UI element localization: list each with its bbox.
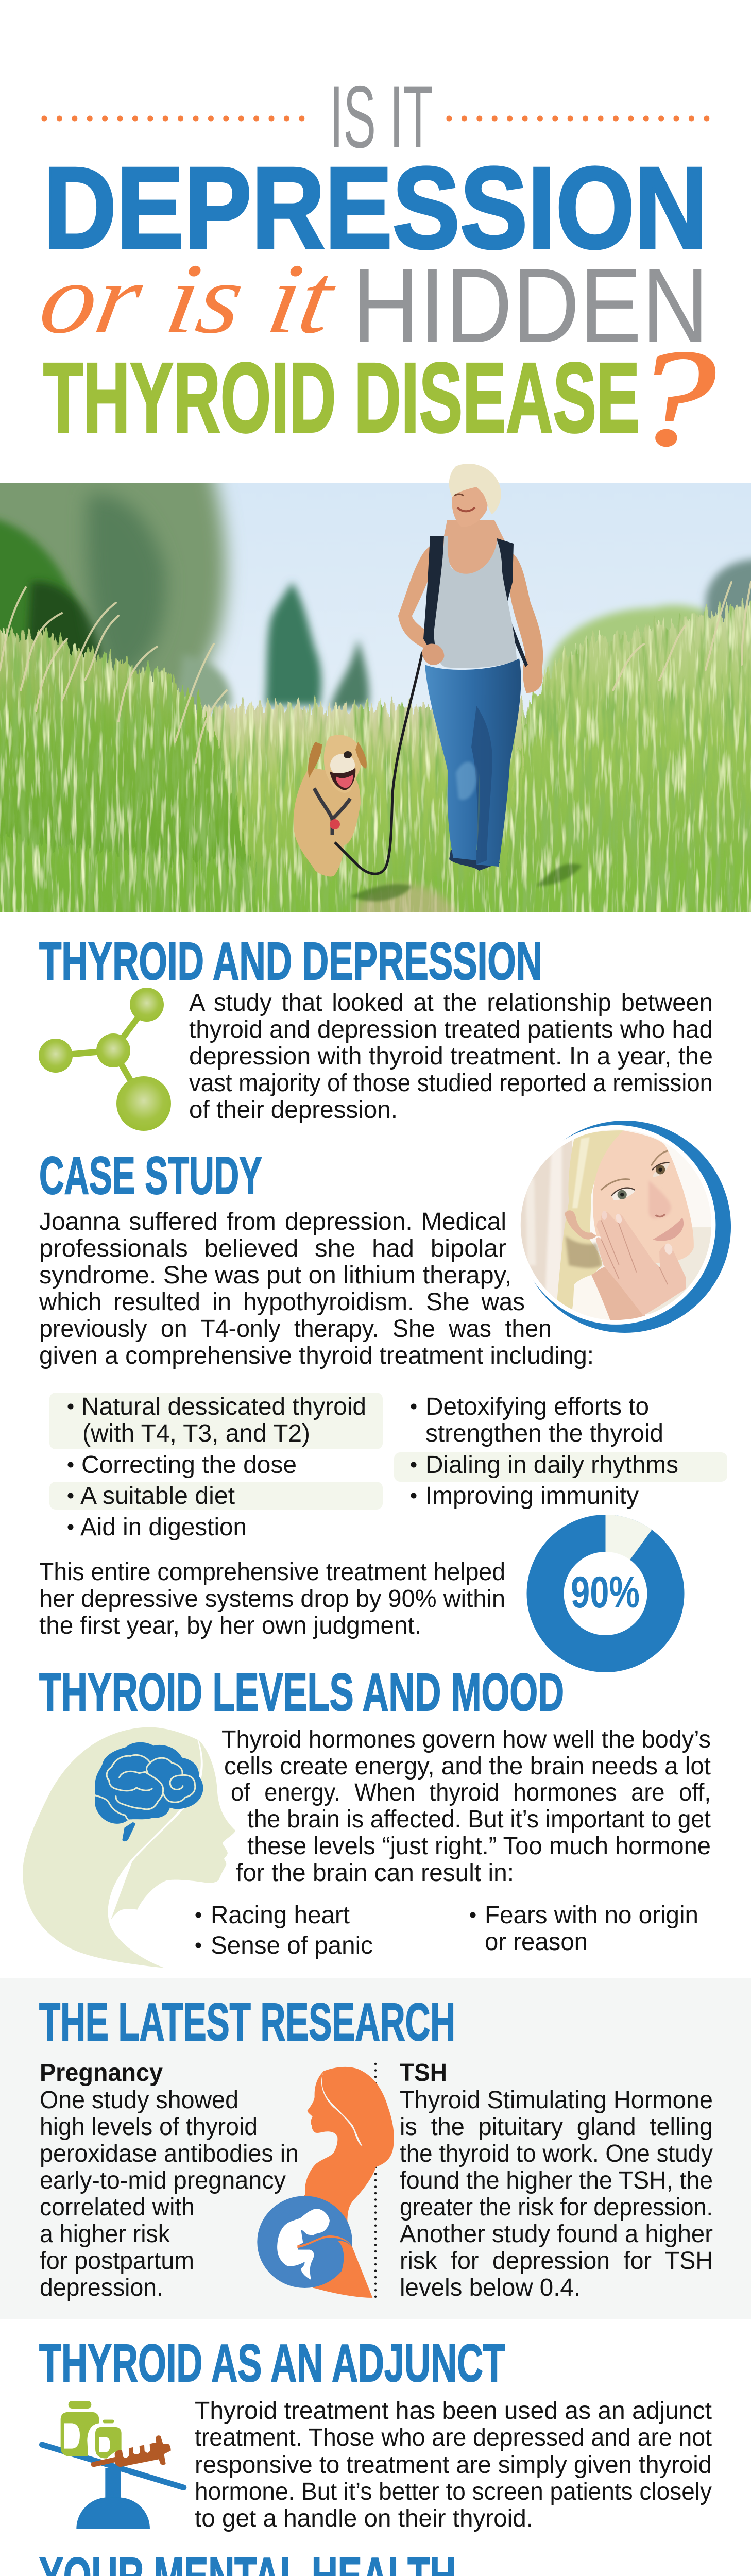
result text: This entire comprehensive treatment helped (39, 1558, 505, 1586)
icon: scale with pills and syringe (42, 2401, 184, 2529)
heading: THYROID AS AN ADJUNCT (39, 2333, 505, 2393)
tsh column: found the higher the TSH, the (400, 2167, 713, 2194)
list item: digestion: Aid in digestion (80, 1514, 247, 1541)
tsh column: is the pituitary gland telling (400, 2113, 713, 2141)
tsh column: greater the risk for depression. (400, 2194, 713, 2221)
tsh column: levels below 0.4. (400, 2274, 581, 2301)
body text: to get a handle on their thyroid. (195, 2505, 533, 2532)
dotted divider (374, 2064, 377, 2299)
icon: pregnant silhouette (257, 2067, 394, 2298)
body text (39, 1208, 594, 1369)
body text: responsive to treatment are simply given thyroid (195, 2451, 712, 2479)
symptom list: Sense of panic (211, 1932, 373, 1959)
highlight: suitable diet (49, 1482, 383, 1510)
donut chart: 90%: 90% (571, 1568, 640, 1617)
body text: depression with thyroid treatment. In a year, the (189, 1043, 713, 1070)
dog (294, 735, 367, 877)
body text: thyroid and depression treated patients who had (189, 1016, 713, 1043)
dotted rule right (449, 115, 707, 122)
pregnancy column: a higher risk (40, 2221, 170, 2248)
pregnancy column: high levels of thyroid (40, 2113, 258, 2141)
list item: correcting dose: Correcting the dose (81, 1451, 297, 1479)
woman (398, 464, 543, 871)
result text: her depressive systems drop by 90% within (39, 1585, 505, 1613)
pregnancy column: Pregnancy (40, 2059, 163, 2087)
section: thyroid and depression (39, 931, 713, 1131)
body text: vast majority of those studied reported a remission (189, 1070, 713, 1097)
body text: Joanna suffered from depression. Medical (39, 1208, 506, 1235)
baby (277, 2209, 330, 2280)
result text: the first year, by her own judgment. (39, 1612, 421, 1639)
heading: THE LATEST RESEARCH (39, 1992, 455, 2052)
result text (39, 1558, 505, 1639)
tsh column: risk for depression for TSH (400, 2247, 713, 2275)
tsh column: Thyroid Stimulating Hormone (400, 2087, 713, 2114)
symptom list: Fears with no origin (485, 1902, 698, 1929)
donut chart: 90% (526, 1515, 684, 1672)
highlight: daily rhythms (394, 1452, 727, 1482)
body text (189, 989, 713, 1124)
highlight: natural thyroid (49, 1393, 383, 1449)
list item: detoxifying: Detoxifying efforts to (425, 1393, 649, 1420)
tsh column: Another study found a higher (400, 2221, 713, 2248)
list item: natural thyroid: (with T4, T3, and T2) (82, 1420, 310, 1447)
body text: hormone. But it’s better to screen patients closely (195, 2478, 712, 2505)
list item: immunity: Improving immunity (425, 1482, 639, 1510)
pregnancy column: One study showed (40, 2087, 238, 2114)
hair (23, 1727, 201, 1968)
title: question mark: ? (631, 321, 716, 474)
umbilical cord (297, 2235, 352, 2248)
pregnancy column: early-to-mid pregnancy (40, 2167, 286, 2194)
pregnancy column: peroxidase antibodies in (40, 2140, 299, 2167)
background trees (0, 453, 751, 721)
body text: Thyroid treatment has been used as an adjunct (195, 2397, 712, 2425)
body text: cells create energy, and the brain needs a lot (224, 1753, 711, 1780)
section: thyroid as an adjunct (39, 2333, 712, 2532)
section: case study (39, 1121, 731, 1672)
hero photo: woman walking dog through a meadow (0, 464, 751, 912)
panel: the latest research (0, 1978, 751, 2319)
body text: previously on T4-only therapy. She was then (39, 1315, 552, 1343)
symptom list (196, 1902, 698, 1959)
body text: for the brain can result in: (236, 1859, 514, 1887)
womb (257, 2196, 352, 2288)
body text: these levels “just right.” Too much hormone (247, 1833, 711, 1860)
list item: suitable diet: A suitable diet (80, 1482, 235, 1510)
symptom list: Racing heart (211, 1902, 350, 1929)
brain (95, 1742, 203, 1841)
body text: A study that looked at the relationship between (189, 989, 713, 1016)
body text: the brain is affected. But it’s important to get (247, 1806, 711, 1833)
title (32, 67, 716, 474)
treatment list (49, 1393, 727, 1541)
pregnancy column: correlated with (40, 2194, 195, 2221)
grass seed heads (0, 582, 751, 762)
tsh column: the thyroid to work. One study (400, 2140, 713, 2167)
pregnancy column (40, 2059, 299, 2301)
heading: THYROID AND DEPRESSION (39, 931, 542, 991)
body text: Thyroid hormones govern how well the body’s (221, 1726, 711, 1753)
body text (221, 1726, 711, 1887)
body text: treatment. Those who are depressed and are not (195, 2424, 712, 2451)
list item: daily rhythms: Dialing in daily rhythms (425, 1451, 678, 1479)
body text (195, 2397, 712, 2532)
icon: head silhouette with brain (23, 1727, 235, 1968)
face (111, 1740, 235, 1920)
symptom list: or reason (485, 1928, 588, 1956)
dog leash (335, 652, 422, 874)
body text: which resulted in hypothyroidism. She was (39, 1289, 525, 1316)
icon: molecule (39, 988, 171, 1131)
pregnancy column: depression. (40, 2274, 163, 2301)
pregnancy column: for postpartum (40, 2247, 194, 2275)
list item: detoxifying (411, 1393, 663, 1447)
body text: of energy. When thyroid hormones are off, (231, 1779, 711, 1806)
body text: syndrome. She was put on lithium therapy, (39, 1262, 511, 1289)
meadow grass (0, 598, 751, 912)
body text: professionals believed she had bipolar (39, 1235, 506, 1262)
hand (596, 1212, 686, 1316)
tsh column (400, 2059, 713, 2301)
dotted rule left (44, 115, 302, 122)
portrait with blue crescent (515, 1121, 731, 1333)
body text: given a comprehensive thyroid treatment including: (39, 1342, 594, 1369)
body text: of their depression. (189, 1096, 398, 1124)
section: thyroid levels and mood (23, 1663, 711, 1968)
list item: detoxifying: strengthen the thyroid (425, 1420, 663, 1447)
tsh column: TSH (400, 2059, 447, 2087)
title: is it: IS IT (330, 67, 433, 166)
list item: natural thyroid: Natural dessicated thyroid (81, 1393, 366, 1420)
title: hidden: HIDDEN (352, 246, 709, 365)
list item: natural thyroid (68, 1393, 366, 1447)
heading: CASE STUDY (39, 1146, 262, 1205)
title: or is it: or is it (32, 243, 344, 354)
